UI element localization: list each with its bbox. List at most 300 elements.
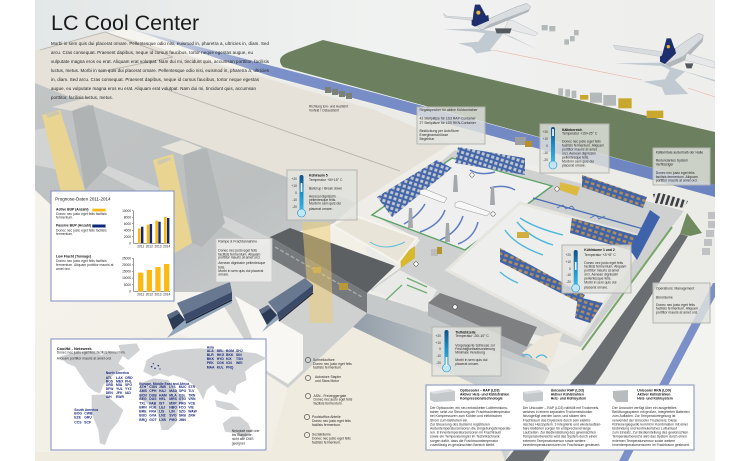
rack 1 [582, 175, 647, 208]
stations: Europe, Middle East and Africa: NBO [169, 405, 177, 409]
Optiocooler text: Außentemperatursensoren die Umgebungstemperatu- [430, 426, 511, 430]
aircraft 2 [613, 33, 715, 95]
stations: Europe, Middle East and Africa: MXP [169, 401, 177, 405]
stations: Europe, Middle East and Africa: Europe, Middle East and Africa [139, 382, 189, 386]
stations: Asia: KIX [226, 357, 232, 361]
column: Optiocooler [430, 389, 511, 447]
stations: Europe, Middle East and Africa: BEG [139, 397, 147, 401]
stations: North America: PHL [125, 380, 132, 384]
stations: Asia: HYD [217, 357, 224, 361]
grey building wall [35, 83, 357, 292]
map footnote: bis Standorte, [232, 433, 253, 437]
rail [533, 198, 647, 230]
freezer text: placerat ornare. [455, 362, 479, 366]
stations: Europe, Middle East and Africa: OSL [179, 393, 186, 397]
ramp text: Aenean dignissim pellentesque [218, 261, 265, 265]
thermometer: +10 [542, 137, 548, 141]
stations: North America: ATL [106, 376, 112, 380]
intro text block: Morbi in sem quis dui placerat ornare. Pellentesque odio nisi, euismod in, pharetra a, ultricies in, diam. Sed [51, 41, 270, 46]
dark service lane [505, 234, 688, 461]
Unicooler RAP heading: Heiz- und Kühlsystem [551, 396, 586, 400]
ground support equipment [542, 25, 663, 118]
thermometer: -20 [543, 158, 548, 162]
Unicooler RAP text: externen Temperatursensor sowie weitere [523, 439, 586, 443]
Unicooler RKN text: verwendet der Unicooler Trockeneis. Diese [612, 418, 677, 422]
bar chart: BUP: 2011 [137, 245, 144, 249]
Unicooler RKN heading [637, 389, 673, 400]
network heading and text: Cool/td - Netzwerk [57, 346, 92, 351]
dock 2 roof [428, 293, 537, 347]
note: exit direction: Vorfeld / Ostausfahrt [309, 108, 339, 112]
Optiocooler heading: Kompressionstechnologie [460, 396, 503, 400]
apron [35, 0, 286, 65]
room 5 text: placerat ornare. [309, 207, 333, 211]
legend: active [56, 208, 107, 220]
room 5 text: Temperatur +5/+15° C [309, 178, 343, 182]
Unicooler RAP text [523, 406, 601, 447]
stations: Europe, Middle East and Africa: CPH [149, 389, 157, 393]
stations: Europe, Middle East and Africa: IST [159, 401, 165, 405]
stations: Europe, Middle East and Africa: LIS [159, 409, 165, 413]
stations: Europe, Middle East and Africa: LNZ [159, 414, 166, 418]
stations: Asia: WEI [236, 361, 242, 365]
bar chart: tonnage: 5000 [124, 283, 131, 287]
Unicooler RKN text: Temperaturbereichs wird das System durch einen [612, 435, 687, 439]
antechamber airflow [522, 354, 547, 358]
intro text block: arcu. Cras consequat. Praesent dapibus, neque id cursus faucibus, tortor neque egestas augue, eu [51, 50, 254, 55]
stations: Europe, Middle East and Africa: GVA [149, 414, 157, 418]
Unicooler RAP text: Frachtraum das Dryeisreis durch sein elektro- [523, 418, 591, 422]
room 5 text: Kühlraum 5 [309, 174, 328, 178]
ramp text: porttitor mauris at amet orci. [218, 256, 261, 260]
rack storage text: 27 Stellplätze für LD9 RKN-Container [420, 121, 477, 125]
operations text: facilisis fermentum. Aliquam [656, 307, 698, 311]
roof crease lines [40, 32, 400, 171]
bar chart: BUP: 2014 [163, 245, 170, 249]
stations: Asia: ALA [207, 349, 214, 353]
rack storage text: 43 Stellplätze für LD3 RAP-Container [420, 116, 477, 120]
legend item 5: Sozialräume [312, 432, 331, 436]
legend item 2: und Stars Motor [315, 379, 340, 383]
stations: Europe, Middle East and Africa: DUB [149, 393, 157, 397]
stations: Europe, Middle East and Africa: GOT [149, 418, 158, 422]
cold rooms text: orci. Aenean dignissim [584, 272, 618, 276]
legend: freight: Donec nec justo eget felis facilisis [56, 259, 107, 263]
legend: freight [56, 255, 114, 271]
yellow forklift road [515, 137, 532, 147]
bar chart: BUP: 0 [129, 241, 131, 245]
ramp text: Rampe & Frachtannahme [218, 240, 257, 244]
stations: North America: ORD [125, 376, 133, 380]
stations: Europe, Middle East and Africa: LIN [169, 409, 175, 413]
legend item 1 [305, 357, 352, 370]
Optiocooler text: Zur Steuerung des Systems registrieren [430, 422, 490, 426]
stations: North America: EWR [116, 395, 124, 399]
numbered legend [304, 357, 353, 444]
legend item 3: facilisis fermentum. [314, 402, 343, 406]
bar chart: tonnage: 20000 [122, 263, 131, 267]
legend: passive: Passive BUP (Anzahl) [56, 224, 91, 228]
panel: network map [51, 339, 267, 450]
legend: passive: Donec nec justo eget felis facilisis [56, 229, 107, 233]
intro text block: augue, eu vulputate magna eros eu erat. Aliquam erat volutpat. Nam dui mi, tincidunt quis, accumsan [51, 86, 257, 91]
Unicooler RAP text: Laufzeiten. Zur Bedienstellung des gewünschten [523, 431, 596, 435]
freezer text: Feuchtigkeitsabsonderung [455, 347, 495, 351]
thermometer: +20 [291, 177, 297, 181]
bar chart: tonnage: 0 [129, 289, 131, 293]
rail zigzag arrows [557, 205, 605, 219]
legend: freight: amet orci. [56, 267, 71, 271]
cold zone text: orci. Aenean dignissim [562, 151, 596, 155]
freezer text: Vorgelagerte Schleuse zur [455, 344, 496, 348]
ramp text: felis. [218, 265, 225, 269]
bar chart: BUP: 2013 [154, 245, 162, 249]
legend: active: Active BUP (Anzahl) [56, 208, 89, 212]
operations text: Operations: Management [656, 286, 694, 290]
stations: Asia: BKK [207, 357, 215, 361]
stations: South America: SCF [84, 421, 91, 425]
stations: Europe, Middle East and Africa: FLR [149, 405, 156, 409]
operations text: porttitor mauris at amet orci. [656, 310, 698, 314]
freezer antechamber [522, 332, 563, 367]
Unicooler RKN text: zum Einsatz. Zur Bedienstellung des gewünschten [612, 431, 688, 435]
stations: North America: YUL [116, 387, 123, 391]
stations: North America: DFW [106, 387, 114, 391]
title: LC Cool Center [51, 11, 199, 35]
bar chart: tonnage: 2014 [163, 292, 170, 296]
room 5 container rack left [377, 160, 452, 217]
stations: Europe, Middle East and Africa: JMN [179, 418, 186, 422]
corner rack [575, 297, 603, 323]
freezer text: Temperatur -20/-10° C [455, 334, 489, 338]
icon: container [523, 390, 543, 402]
legend item 3: Donec nec justo eget felis [314, 398, 353, 402]
stations: South America: EZE [74, 416, 82, 420]
bar chart: BUP: 4000 [124, 228, 131, 232]
freezer text [455, 330, 496, 366]
stations: Asia: PNQ [226, 365, 234, 369]
stations: North America: IAH [106, 395, 112, 399]
stations: Europe, Middle East and Africa: HAJ [159, 389, 166, 393]
Unicooler RKN heading: Heiz- und Kühlsystem [637, 396, 673, 400]
external cooling text [656, 150, 703, 183]
truck 2 [259, 278, 313, 332]
stations: Europe, Middle East and Africa: CGN [149, 385, 157, 389]
stations: Europe, Middle East and Africa: OTO [179, 397, 186, 401]
Unicooler RAP text: bare Batterien sorgen für entsprechend lange [523, 426, 591, 430]
stations: Asia: KUL [217, 365, 224, 369]
operations text: Büroräume [656, 295, 673, 299]
Unicooler RKN text: Belüftungssystem mit großen, integrierten Batterien [612, 410, 690, 414]
stations: Europe, Middle East and Africa: BRN [139, 405, 147, 409]
thermometer: -20 [436, 361, 441, 365]
column: Unicooler RKN [612, 389, 690, 447]
thermometer: +10 [291, 184, 297, 188]
bar chart: BUP: 10000 [122, 209, 131, 213]
legend: freight: Low Fracht (Tonnage) [56, 255, 91, 259]
stations: Europe, Middle East and Africa: FRA [149, 409, 157, 413]
bar chart: tonnage: 10000 [122, 276, 131, 280]
network heading and text [57, 346, 126, 360]
thermometer: 0 [295, 191, 297, 195]
stations: Asia: PEK [207, 361, 214, 365]
Unicooler RAP text: Innentemperatursensoren im Frachtraum gesteuert. [523, 443, 600, 447]
thermometer [291, 175, 306, 217]
grass strip [280, 40, 715, 185]
Unicooler RKN text [612, 406, 690, 447]
rack 3 [500, 248, 585, 303]
tower 2 [153, 140, 225, 253]
legend item 1: facilisis fermentum. [313, 366, 342, 370]
stations: Europe, Middle East and Africa: SZG [179, 409, 186, 413]
cold rooms text: porttitor mauris at amet [584, 268, 619, 272]
rack 2 [570, 218, 638, 250]
Optiocooler text: zuverlässig im gewünschten Bereich bleibt. [430, 443, 495, 447]
stations: Asia: CGK [217, 361, 225, 365]
ledges [35, 128, 56, 169]
stations: North America: MEX [116, 380, 124, 384]
note: exit direction [309, 104, 348, 112]
thermometer: -20 [292, 205, 297, 209]
bar chart: tonnage: 2012 [146, 292, 153, 296]
rack storage text: Begehbar [420, 137, 435, 141]
stations: Europe, Middle East and Africa: SVO [169, 414, 177, 418]
Optiocooler heading [460, 389, 509, 400]
small room 5 side bay [332, 215, 417, 263]
legend item 4: Donec nec justo eget felis [312, 419, 351, 423]
thermometer: -10 [292, 198, 297, 202]
external cooling text: porttitor mauris at amet orci. [656, 179, 698, 183]
stations: Europe, Middle East and Africa: STR [188, 385, 196, 389]
Unicooler RKN text: Innentemperatursensoren im Frachtraum gesteuert. [612, 443, 690, 447]
bright yard patch [235, 296, 303, 384]
stations: South America: CCS [74, 421, 82, 425]
green outline outer [582, 227, 672, 350]
legend item 5 [304, 432, 351, 444]
operations text: Donec nec justo eget felis [656, 303, 695, 307]
right rack [630, 210, 660, 260]
rack storage text: Energieanschlüsse [420, 133, 448, 137]
legend: active: Donec nec justo eget felis facilisis [56, 212, 107, 216]
intro text block: porttitor, facilisis luctus, metus. [51, 95, 113, 100]
stations: Europe, Middle East and Africa: TXL [139, 401, 146, 405]
intro text block: vulputate magna eros eu erat. Aliquam erat volutpat. Nam dui mi, tincidunt quis, accumsan porttitor, facilisis [51, 59, 270, 64]
truck yard concrete [220, 260, 367, 388]
panel: cold zone [540, 124, 609, 173]
legend item 3: ASN - Freizeggergate [314, 394, 346, 398]
stations: Europe, Middle East and Africa: VIE [188, 405, 195, 409]
stations: Europe, Middle East and Africa: PRG [179, 401, 186, 405]
translucent yellow column [302, 222, 333, 323]
corridor room floor [372, 270, 437, 312]
bar chart: BUP: 6000 [124, 222, 131, 226]
thermometer: 0 [569, 267, 571, 271]
Optiocooler text: Der Optiocooler, ein neu entwickelter Lufttrennkons- [430, 406, 508, 410]
main complex [270, 137, 715, 372]
forklift rooms [517, 232, 529, 238]
legend item 4: facilisis fermentum. [312, 423, 341, 427]
thermometer: -20 [566, 280, 571, 284]
Unicooler RKN heading: Unicooler RKN (LD9) [637, 389, 671, 393]
thermometer: +10 [435, 341, 441, 345]
ramp text: facilisis fermentum. Aliquam [218, 252, 260, 256]
legend: freight: fermentum. Aliquam porttitor mauris at [56, 263, 114, 267]
cold zone text: Donec nec justo eget felis [562, 139, 601, 143]
stations: Asia: DEL [217, 349, 223, 353]
Optiocooler text: sorgen dafür, dass die Frachtraumtemperatur [430, 439, 499, 443]
ramp text: ornare. [218, 273, 229, 277]
Unicooler RAP heading: Aktiver Kühlstrahlen [551, 392, 584, 396]
stations: Europe, Middle East and Africa: WAW [188, 409, 198, 413]
thermometer [435, 330, 450, 372]
Optiocooler text: tainer, setzt zur Steuerung der Frachtraumtemperatur [430, 410, 511, 414]
stations: North America: ORD [106, 383, 114, 387]
rooms 1/2 airflow arrows [500, 218, 563, 283]
stations: North America: JFK [116, 391, 123, 395]
cold rooms text: placerat ornare. [584, 285, 608, 289]
outer right verge [628, 297, 715, 461]
thermometer: 0 [546, 144, 548, 148]
stations: Europe, Middle East and Africa: LYS [169, 385, 176, 389]
room 5 floor [372, 158, 552, 250]
stations: Europe, Middle East and Africa: TRN [188, 393, 196, 397]
stations: Europe, Middle East and Africa: SKB [179, 414, 186, 418]
front road [353, 313, 550, 461]
rack storage text: Regalspeicher für aktive Kühlcontainer [420, 108, 478, 112]
cold zone text: Kältebereich [562, 128, 582, 132]
stations: South America: GRU [84, 416, 92, 420]
freezer text: Morbi in sem quis dui [455, 358, 488, 362]
legend item 2 [305, 375, 342, 383]
stations: South America: South America [74, 408, 98, 412]
dock face [270, 237, 367, 313]
cold zone text: pellentesque felis. [562, 155, 589, 159]
service road [182, 54, 501, 152]
Optiocooler heading: Optiocooler – RAP (LD3) [460, 389, 500, 393]
stations: North America [106, 371, 133, 399]
stations: North America: DEN [106, 391, 113, 395]
cold rooms text: Morbi in sem quis dui [584, 281, 617, 285]
stations: Asia [207, 346, 243, 369]
stations: North America: LAX [116, 376, 124, 380]
bar chart: tonnage [122, 256, 170, 296]
stations: Europe, Middle East and Africa: HEL [159, 397, 166, 401]
Unicooler RAP text: welches in einem separaten Trockeneisbunker [523, 410, 593, 414]
silver columns [408, 175, 495, 242]
green verge by lane [680, 213, 702, 236]
thermometer [542, 127, 557, 169]
panel: operations [653, 283, 710, 323]
beige roof [35, 32, 452, 203]
cold zone text [562, 128, 604, 167]
rooms 1 and 2 floor [447, 203, 647, 340]
stations: Europe, Middle East and Africa: FAB [149, 401, 157, 405]
bar chart: BUP [122, 209, 170, 249]
legend item 4: Poolstoffice Abteile [312, 415, 341, 419]
Optiocooler text: Strom zum Betrieben ein. [430, 418, 468, 422]
legend: active: fermentum. [56, 216, 73, 220]
stations: Europe, Middle East and Africa: MLA [169, 393, 177, 397]
stations: Europe, Middle East and Africa: FCO [179, 405, 186, 409]
stations: Europe, Middle East and Africa: LEJ [159, 405, 165, 409]
Unicooler RAP text: nisches Heizsystem. 3 integrierte und wiederaufsan- [523, 422, 601, 426]
bar chart: BUP: 2000 [124, 235, 131, 239]
cold rooms text [584, 248, 626, 289]
legend item 1: Schnellaufture [313, 358, 335, 362]
stations: North America: North America [106, 371, 129, 375]
stations: Europe, Middle East and Africa: AMS [139, 389, 148, 393]
small tugs [325, 87, 352, 99]
Unicooler RAP text: hinzugefügt werden kann, und sätzen den [523, 414, 586, 418]
Unicooler RKN text: externen Temperatursensor sowie weitere [612, 439, 675, 443]
thermometer: -10 [543, 151, 548, 155]
thermometer: +10 [565, 260, 571, 264]
ramp text: Donec nec justo eget felis [218, 249, 257, 253]
Optiocooler text: bei Kompressoren zum Kühlen und elektrischen [430, 414, 502, 418]
left yard brightening [175, 292, 244, 338]
map footnote: geeignet [232, 442, 245, 446]
cold rooms text: pellentesque felis. [584, 276, 612, 280]
intro text block: in, diam. Sed arcu. Cras consequat. Praesent dapibus, neque id cursus faucibus, tortor neque egestas [51, 77, 260, 82]
room 5 text: Build up / Break down [309, 186, 342, 190]
dock roof [270, 228, 395, 293]
stations: Europe, Middle East and Africa: BRQ [139, 418, 147, 422]
stations: North America: MIA [116, 383, 123, 387]
external cooling text: Donec nec justo eget felis [656, 171, 695, 175]
thermometer: +20 [542, 130, 548, 134]
stations: North America: BOS [106, 380, 114, 384]
stations: Asia: HKG [217, 353, 225, 357]
cold rooms text: Kühlräume 1 und 2 [584, 248, 615, 252]
panel: containers [426, 385, 694, 450]
tower 1 [42, 100, 107, 196]
cold zone text: porttitor mauris at amet [562, 147, 597, 151]
truck 1 [167, 282, 232, 338]
stations: Europe, Middle East and Africa: BCN [139, 393, 147, 397]
map footnote [232, 429, 260, 446]
stations: North America: IAD [125, 391, 131, 395]
icon: container [430, 389, 455, 402]
room 5 text: Aerosol dignissim [309, 195, 336, 199]
stations: Asia: MAA [207, 365, 215, 369]
complex outer walls [360, 144, 450, 331]
legend item 4 [304, 414, 351, 427]
rack storage text [420, 108, 478, 141]
chillers [653, 193, 688, 208]
legend: passive: fermentum. [56, 232, 73, 236]
bay airflow [370, 242, 405, 247]
stations: Europe, Middle East and Africa: OPO [179, 389, 187, 393]
panel: rack storage [417, 107, 485, 144]
yellow door [400, 246, 415, 268]
external cooling text: Kältemitale außerhalb der Halle [656, 150, 703, 154]
thermometer: 0 [439, 347, 441, 351]
panel: cold rooms 1 and 2 [562, 245, 631, 293]
rack storage text: Bestückung per AutoStore [420, 129, 459, 133]
bar chart: BUP: 2012 [146, 245, 153, 249]
stations: South America [74, 408, 98, 425]
stations: Asia: ICN [226, 361, 232, 365]
Unicooler RAP heading [551, 389, 586, 400]
thermometer [565, 250, 580, 292]
Unicooler RKN text: zum Aufladen. Zur Temperaturregelung ist [612, 414, 675, 418]
thermometer: +20 [435, 334, 441, 338]
numbered markers [414, 173, 559, 309]
room 5 text: pellentesque felis. [309, 198, 336, 202]
Unicooler RAP text: Temperaturbereichs wird das System durch einen [523, 435, 597, 439]
operations text [656, 286, 698, 314]
Optiocooler text: ren. 8 Innentemperatursensoren im Frachtraum [430, 431, 501, 435]
